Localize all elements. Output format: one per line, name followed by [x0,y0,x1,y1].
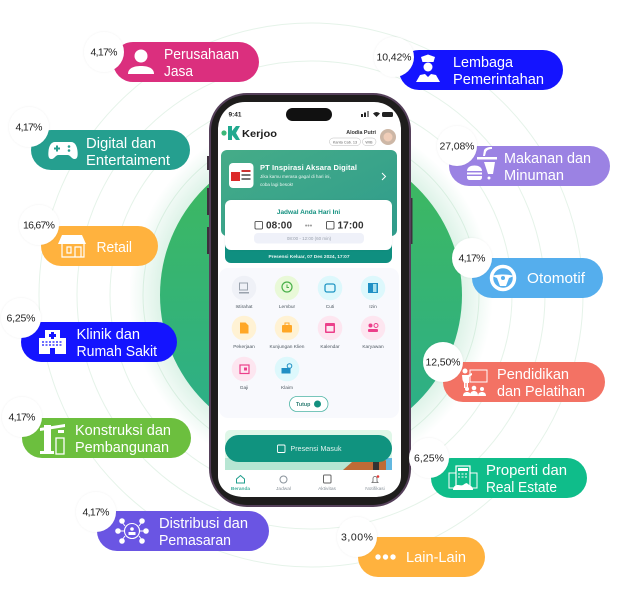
icon: customer service [128,50,154,74]
category: Makanan dan Minuman: Minuman [504,168,564,184]
icon: shop [58,235,86,257]
company card [221,150,397,236]
banner illustration [225,430,392,470]
category: Distribusi dan Pemasaran: Distribusi dan [159,516,248,532]
bottom navigation [218,470,401,497]
category: Pendidikan dan Pelatihan: Pendidikan [497,367,569,383]
logo [221,126,277,140]
user profile [330,129,396,146]
category: Makanan dan Minuman [437,126,610,186]
bottom navigation: Notifikasi [365,486,385,492]
menu labels: Pekerjaan [233,344,255,350]
schedule card: Presensi Keluar, 07 Des 2024, 17:07 [268,254,350,260]
menu labels: Gaji [240,385,248,391]
presensi masuk button: Presensi Masuk [290,446,342,453]
icon: burger and drink [467,147,497,180]
category: Lembaga Pemerintahan: 10,42% [376,52,412,64]
category: Retail: 16,67% [23,220,55,232]
category: Properti dan Real Estate: Properti dan [486,463,567,479]
phone mockup [207,93,412,507]
menu labels: Lembur [279,304,296,310]
icon: steering wheel [492,266,514,290]
menu labels: Kunjungan Klien [270,344,305,350]
phone frame [209,93,411,507]
menu labels: Klaim [281,385,293,391]
user profile: WIB [365,140,373,144]
icon: teacher with students [462,368,487,396]
category: Retail [19,205,158,266]
background rings [39,23,583,567]
green glow [129,113,493,477]
schedule card: 17:00 [338,220,364,232]
company card: PT Inspirasi Aksara Digital [260,163,357,172]
category: Lembaga Pemerintahan [374,37,563,90]
category: Digital dan Entertaiment [9,107,190,170]
menu icons grid [232,276,385,381]
category: Otomotif [452,238,603,298]
category: Lain-Lain: 3,00% [341,532,373,544]
icon: police officer [416,54,440,82]
schedule card: ••• [305,223,313,230]
menu labels [233,304,384,391]
category: Lain-Lain [337,517,485,577]
icon: hospital [39,330,66,354]
category: Perusahaan Jasa [84,32,259,82]
phone side buttons [207,156,412,254]
schedule card: Jadwal Anda Hari Ini [277,209,340,216]
company card: coba lagi besok! [260,182,293,187]
category: Distribusi dan Pemasaran [76,492,269,551]
bottom navigation: Jadwal [276,486,291,492]
category: Retail: Retail [96,240,132,256]
category: Distribusi dan Pemasaran: 4,17% [82,506,110,518]
category: Pendidikan dan Pelatihan [423,342,605,402]
icon: three dots [375,554,396,560]
category: Konstruksi dan Pembangunan: Pembangunan [75,440,169,456]
category: Digital dan Entertaiment: Digital dan [86,136,156,152]
category: Otomotif: Otomotif [527,271,586,287]
logo: Kerjoo [242,128,277,140]
category: Makanan dan Minuman: 27,08% [440,140,474,152]
tutup button: Tutup [296,402,311,408]
schedule card: 08:00 [266,220,292,232]
category: Klinik dan Rumah Sakit [1,298,177,362]
menu labels: Karyawan [362,344,384,350]
tutup button [290,396,328,412]
category: Pendidikan dan Pelatihan: 12,50% [426,356,460,368]
category: Klinik dan Rumah Sakit: Rumah Sakit [76,344,157,360]
icon: buildings with people [449,466,477,490]
user profile: Kanta Cab. 13 [333,140,357,144]
category: Konstruksi dan Pembangunan [2,397,191,458]
menu labels: Izin [369,304,377,310]
category: Lembaga Pemerintahan: Lembaga [453,55,514,71]
icon: game controller [48,142,78,159]
central green circle [160,144,462,446]
category: Lain-Lain: Lain-Lain [406,550,466,566]
status bar [228,108,393,121]
category: Properti dan Real Estate: Real Estate [486,480,557,496]
category: Klinik dan Rumah Sakit: 6,25% [6,312,36,324]
category: Konstruksi dan Pembangunan: 4,17% [8,412,36,424]
bottom navigation: Beranda [231,486,250,492]
category: Perusahaan Jasa: Perusahaan [164,47,239,63]
category: Properti dan Real Estate [409,438,587,498]
category: Konstruksi dan Pembangunan: Konstruksi dan [75,423,171,439]
category: Properti dan Real Estate: 6,25% [414,452,444,464]
schedule card: 08:00 - 12:00 (60 min) [287,236,332,241]
icon: crane [40,424,65,454]
category: Perusahaan Jasa: 4,17% [90,46,118,58]
menu labels: Cuti [326,304,334,310]
bottom navigation: Aktivitas [318,486,337,492]
menu labels: Kalendar [320,344,340,350]
category: Perusahaan Jasa: Jasa [164,64,194,80]
category: Makanan dan Minuman: Makanan dan [504,151,591,167]
category: Klinik dan Rumah Sakit: Klinik dan [76,327,140,343]
presensi masuk button [225,435,392,462]
schedule card [225,200,392,263]
category: Distribusi dan Pemasaran: Pemasaran [159,533,231,549]
category: Digital dan Entertaiment: Entertaiment [86,153,170,169]
category: Pendidikan dan Pelatihan: dan Pelatihan [497,384,585,400]
phone screen [218,102,401,497]
status bar: 9:41 [228,112,242,118]
company card: Jika kamu merasa gagal di hari ini, [260,174,331,179]
category: Lembaga Pemerintahan: Pemerintahan [453,72,544,88]
category: Digital dan Entertaiment: 4,17% [16,122,42,134]
category: Otomotif: 4,17% [458,252,486,264]
menu panel [219,268,399,418]
icon: network [116,519,148,543]
menu labels: Istirahat [235,304,253,310]
user profile: Alodia Putri [346,130,377,136]
